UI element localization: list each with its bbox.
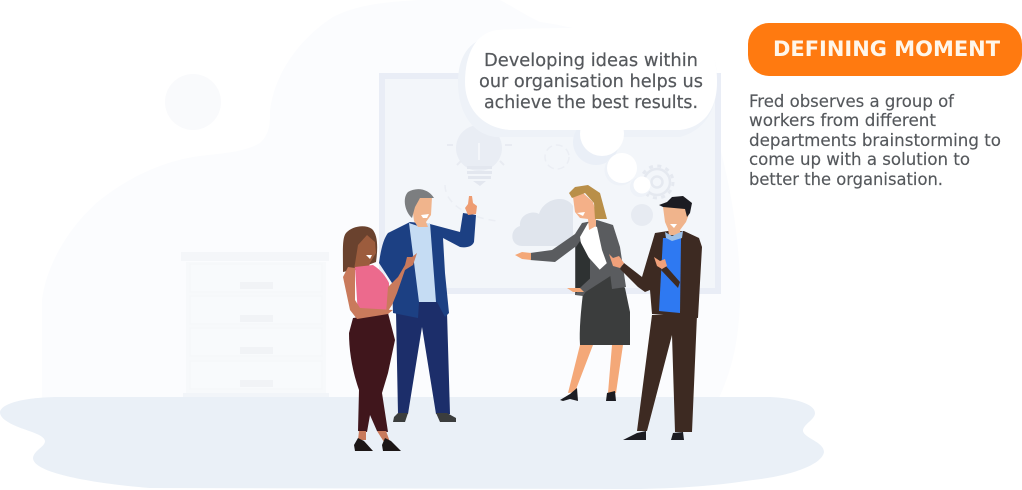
smile xyxy=(577,212,585,216)
hair xyxy=(405,189,434,218)
hair xyxy=(569,185,607,219)
sleeve xyxy=(661,265,680,288)
trousers xyxy=(637,315,697,432)
jacket xyxy=(379,213,476,318)
blouse xyxy=(580,223,610,272)
ankles xyxy=(358,431,390,442)
jacket lining xyxy=(576,241,590,293)
shoes xyxy=(623,431,684,440)
lower arm xyxy=(578,263,612,293)
neck and face xyxy=(412,197,432,227)
shoes xyxy=(354,438,401,451)
description text: Fred observes a group of xyxy=(749,92,955,111)
icon: cloud xyxy=(512,199,573,246)
icon: small gear xyxy=(631,204,653,226)
shoes xyxy=(560,388,616,401)
cap xyxy=(659,196,692,217)
trousers xyxy=(396,298,450,414)
speech text: our organisation helps us xyxy=(479,71,703,92)
icon: gear xyxy=(641,166,673,198)
hands xyxy=(515,252,584,292)
forearm and hand xyxy=(386,253,417,314)
speech text: achieve the best results. xyxy=(484,92,698,113)
speech text xyxy=(479,50,703,113)
decorative circle xyxy=(165,74,221,130)
woman in grey suit xyxy=(515,185,630,401)
shirt xyxy=(409,223,436,302)
smile xyxy=(421,214,429,218)
description text xyxy=(749,92,1001,189)
heading text: DEFINING MOMENT xyxy=(773,37,1001,61)
icon: dashed circle xyxy=(545,145,569,169)
blue sweater xyxy=(659,238,681,313)
skirt xyxy=(580,273,630,345)
hands xyxy=(609,254,667,269)
jacket xyxy=(620,231,702,318)
back arm xyxy=(343,267,393,319)
man in brown jacket xyxy=(609,196,702,440)
woman in pink top xyxy=(343,226,417,451)
face xyxy=(354,235,376,270)
heading pill xyxy=(748,23,1022,76)
pink top xyxy=(355,265,389,316)
collar xyxy=(665,231,683,241)
legs xyxy=(568,345,623,393)
whiteboard xyxy=(382,76,718,291)
trousers xyxy=(349,313,395,432)
shoes xyxy=(393,413,456,422)
icon: light bulb xyxy=(445,125,512,221)
description text: departments brainstorming to xyxy=(749,131,1001,150)
speech bubble xyxy=(458,28,717,197)
description text: better the organisation. xyxy=(749,170,943,189)
description text: come up with a solution to xyxy=(749,150,970,169)
face and neck xyxy=(573,193,596,230)
raised hand xyxy=(465,196,477,215)
floor xyxy=(0,397,824,489)
description text: workers from different xyxy=(749,111,937,130)
filing cabinet xyxy=(181,252,329,398)
smile xyxy=(366,255,372,259)
background blob xyxy=(42,0,740,400)
hair xyxy=(343,226,377,272)
jacket xyxy=(530,220,626,296)
face and neck xyxy=(663,207,689,235)
smile xyxy=(670,224,677,228)
speech text: Developing ideas within xyxy=(484,50,698,71)
man in blue jacket xyxy=(379,189,477,422)
